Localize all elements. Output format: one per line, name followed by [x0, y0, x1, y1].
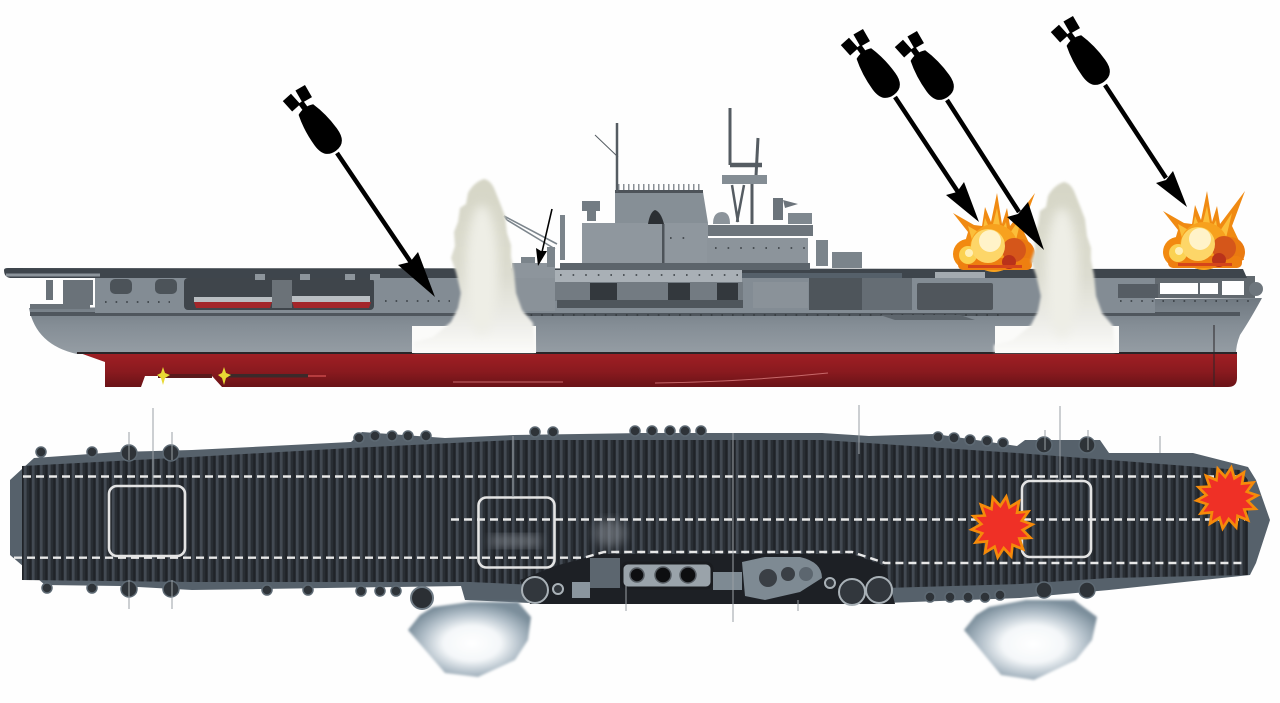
- propellers: [157, 367, 326, 385]
- white spray base: [995, 326, 1119, 353]
- white spray base: [412, 326, 536, 353]
- elevator outlines: [109, 481, 1091, 568]
- fire cloud: [953, 224, 1035, 272]
- flame spikes: [953, 193, 1035, 262]
- hull detail: lower rib: [880, 315, 975, 320]
- red lower hull: [77, 352, 1237, 387]
- plume highlight: [466, 205, 498, 335]
- catwalk scallops: [36, 426, 1095, 602]
- top view of flight deck: [10, 405, 1270, 622]
- bomb: [894, 30, 959, 105]
- aft platform: [708, 225, 813, 236]
- water plume: near miss aft: [412, 179, 536, 353]
- arrow: [1105, 85, 1187, 207]
- masts and radar: [595, 108, 767, 224]
- bomb and arrow 2: [840, 28, 979, 222]
- near-miss blast from above, aft: [408, 602, 531, 677]
- thin antenna lines: [129, 405, 1160, 622]
- deck outline: [10, 432, 1270, 603]
- boat bay: [184, 278, 374, 310]
- tower seam: [662, 224, 664, 264]
- flight deck: [4, 268, 1247, 278]
- explosion: flight deck hit forward: [1163, 191, 1245, 270]
- aft box: [788, 213, 812, 224]
- fore column and small mount: [521, 215, 565, 267]
- flame spikes: [1163, 191, 1245, 260]
- bomb and arrow 3: [894, 30, 1044, 250]
- gallery deck: [95, 276, 1155, 313]
- flight deck edge: [6, 274, 100, 276]
- small arrow at island: [536, 209, 552, 266]
- director: [582, 201, 600, 221]
- aft mount: [816, 240, 862, 268]
- bomb and arrow 4: [1050, 15, 1187, 207]
- gun tubs: [522, 577, 892, 605]
- smoke smudge on deck: [594, 519, 626, 547]
- aft gun: [773, 198, 798, 220]
- plume column: [414, 179, 535, 352]
- deck gun tubs: [255, 272, 985, 280]
- grey upper hull: [29, 298, 1262, 354]
- island base dark strip: [560, 263, 810, 270]
- portholes: [105, 301, 1250, 315]
- island portholes: [560, 238, 805, 275]
- aft lower block: [707, 238, 808, 264]
- fore lower block: [512, 278, 555, 311]
- inner flame spikes: [1178, 206, 1232, 238]
- explosion: flight deck hit amidships: [953, 193, 1035, 272]
- bomb and arrow 1: [282, 84, 435, 297]
- crane: [504, 216, 557, 249]
- arrow: [947, 100, 1044, 250]
- bomb: [1050, 15, 1115, 90]
- tower top antennas: [618, 184, 702, 190]
- glow inside elevator: [490, 535, 540, 547]
- bomb: [282, 84, 347, 159]
- stern supports: [30, 280, 93, 309]
- aft dome: [713, 212, 730, 224]
- plume highlight: [1046, 208, 1078, 338]
- bomb: [840, 28, 905, 103]
- island from above: [520, 554, 895, 604]
- fore block: [512, 263, 555, 278]
- arrow: [337, 153, 435, 297]
- island tower: [512, 187, 862, 311]
- arrow: [895, 97, 979, 222]
- side view of carrier: [4, 108, 1263, 387]
- bow structure: [1155, 276, 1263, 298]
- hull stripe: [453, 373, 828, 383]
- plume column: [994, 182, 1115, 352]
- tower arch: [648, 210, 664, 224]
- near-miss blast from above, forward: [964, 600, 1097, 680]
- water plume: near miss forward: [994, 182, 1119, 353]
- red hit marker amidships: [965, 489, 1039, 565]
- bow stem line: [1213, 325, 1215, 386]
- gallery openings: [110, 278, 1158, 310]
- island lower band: [555, 270, 902, 308]
- fire cloud: [1163, 222, 1245, 270]
- waterline: [77, 352, 1237, 354]
- aft port gun tub: [411, 587, 433, 609]
- upper tower: [615, 192, 708, 223]
- dashed deck lines: [14, 476, 1245, 563]
- inner flame spikes: [968, 208, 1022, 240]
- tower top edge: [615, 190, 703, 193]
- hull band: [30, 312, 1240, 316]
- main block: [582, 223, 708, 264]
- deck planking: [22, 440, 1248, 588]
- red hit marker forward: [1190, 460, 1264, 536]
